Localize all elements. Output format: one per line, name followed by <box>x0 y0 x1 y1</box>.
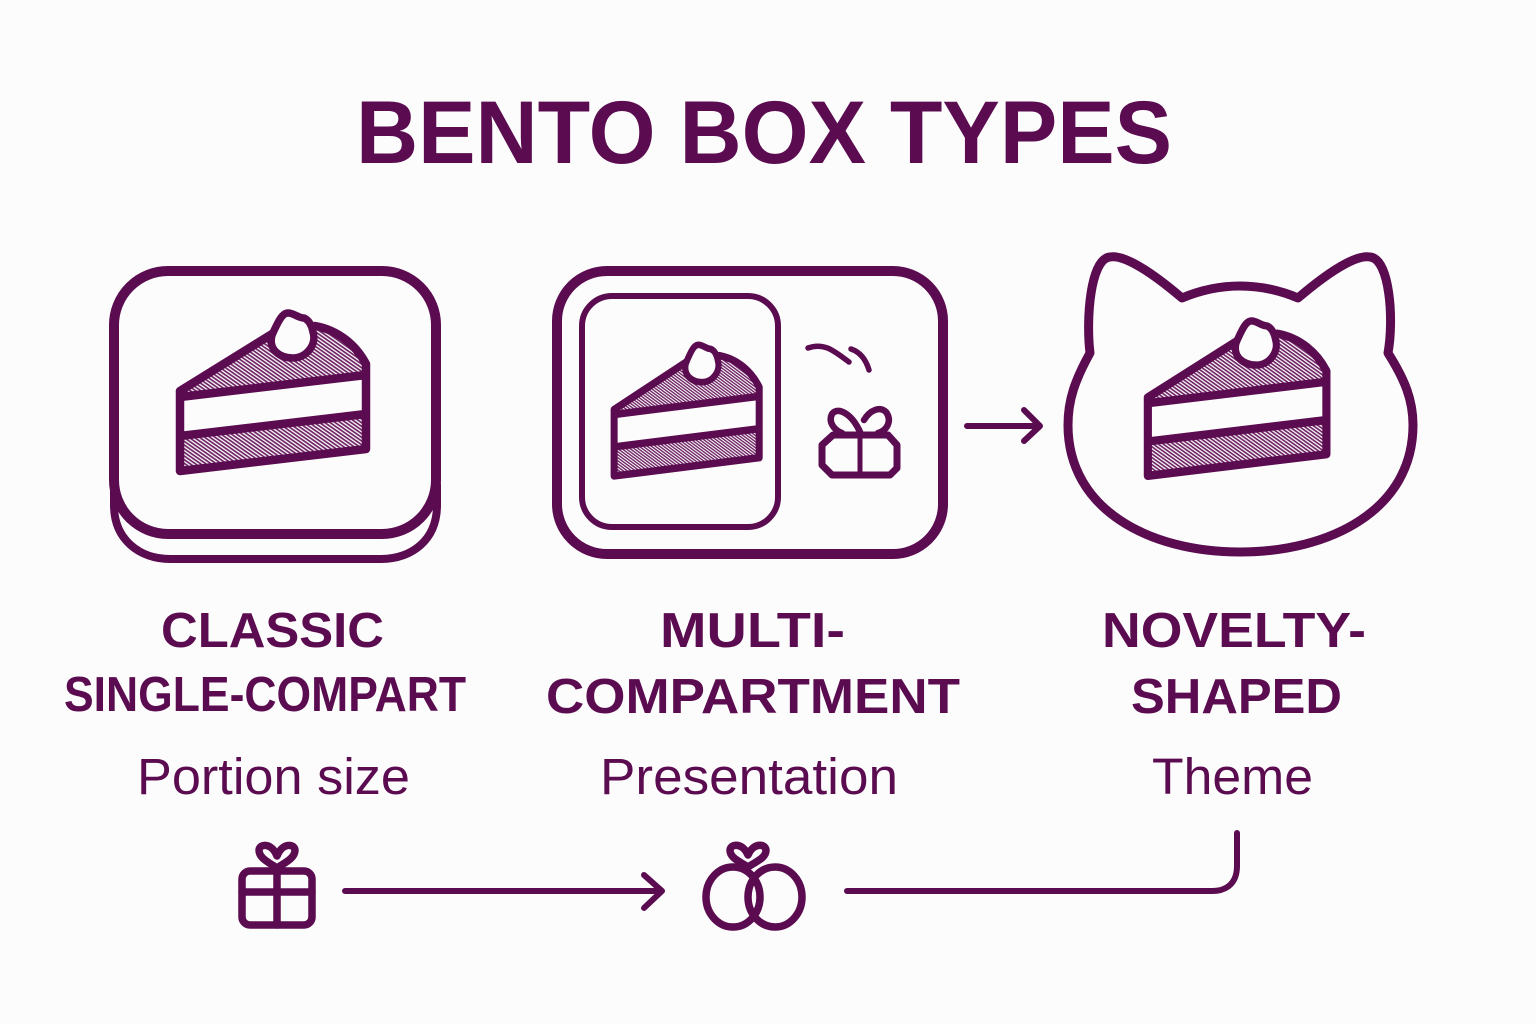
label: classic single-compartment <box>64 604 466 722</box>
arrow: presentation to theme <box>847 833 1237 891</box>
label: novelty-shaped: NOVELTY- <box>1102 604 1366 658</box>
text: presentation: Presentation <box>600 748 898 805</box>
icon: small gift <box>822 409 897 475</box>
label: multi-compartment: COMPARTMENT <box>546 670 960 724</box>
text: theme: Theme <box>1152 748 1313 805</box>
icon: cake slice <box>614 345 759 476</box>
label: novelty-shaped <box>1102 604 1366 724</box>
icon: gift <box>242 845 312 925</box>
icon: interlocked rings with bow <box>706 845 802 927</box>
title: BENTO BOX TYPES <box>356 82 1172 182</box>
panel: classic single-compartment box <box>114 271 437 559</box>
text: portion size: Portion size <box>137 748 410 805</box>
label: classic single-compartment: SINGLE-COMPART <box>64 668 466 722</box>
label: novelty-shaped: SHAPED <box>1131 670 1342 724</box>
icon: swooshes <box>808 346 869 370</box>
label: multi-compartment <box>546 604 960 724</box>
arrow: multi-compartment to novelty <box>967 410 1040 441</box>
icon: inner compartment <box>582 296 778 527</box>
icon: cat-shaped box outline <box>1068 257 1413 552</box>
icon: outer tray <box>557 271 943 554</box>
icon: cake slice <box>1148 321 1326 476</box>
icon: cake slice <box>180 313 366 471</box>
icon: classic box outline <box>114 271 436 534</box>
label: classic single-compartment: CLASSIC <box>161 604 384 658</box>
arrow: portion size to presentation <box>345 875 662 908</box>
label: multi-compartment: MULTI- <box>660 604 845 658</box>
icon: lower box layer <box>114 485 437 559</box>
panel: novelty-shaped box <box>1068 257 1413 552</box>
panel: multi-compartment box <box>557 271 943 554</box>
